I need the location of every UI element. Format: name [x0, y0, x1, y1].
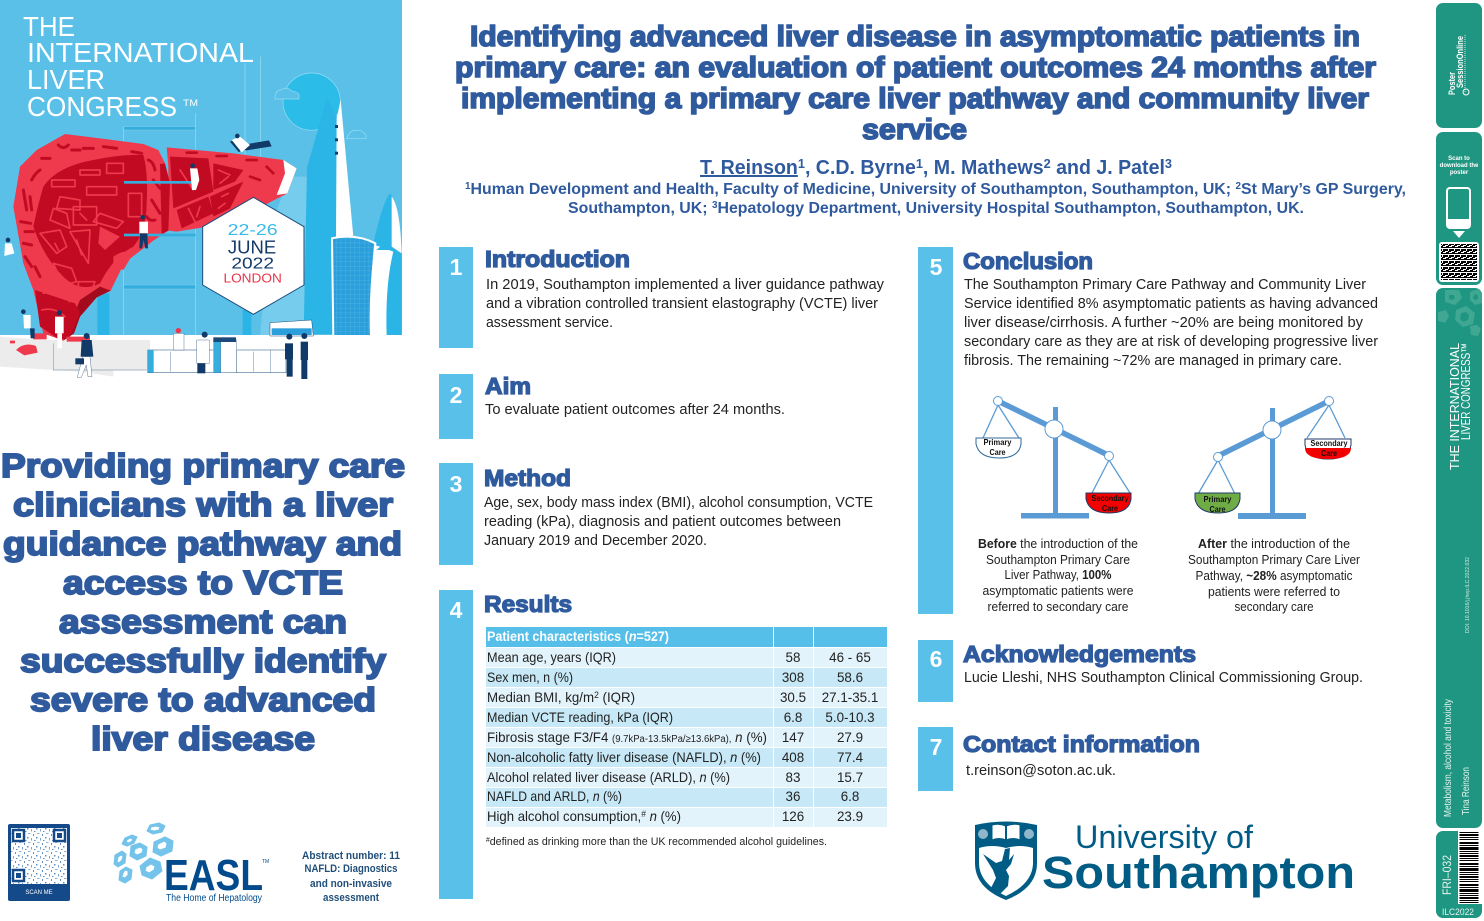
- congress name: CONGRESS: [27, 91, 177, 122]
- section 2: aim: Aim: [485, 373, 531, 399]
- table: patient characteristics: Median VCTE reading, kPa (IQR): [487, 709, 673, 725]
- section 3: method: [439, 463, 873, 565]
- section 2: aim: 2: [450, 382, 462, 408]
- title: implementing a primary care liver pathway and community liver: [461, 83, 1369, 115]
- section 1: introduction: assessment service.: [486, 314, 613, 331]
- logo: EASL: TM: [262, 859, 269, 865]
- section 5: conclusion: liver disease/cirrhosis. A further ~20% are being monitored by: [964, 314, 1363, 331]
- chart: before scale: Care: [1102, 503, 1118, 513]
- left message: successfully identify: [20, 643, 386, 680]
- section 1: introduction: Introduction: [485, 246, 630, 272]
- chart: before scale: Care: [990, 447, 1006, 457]
- table: patient characteristics: (IQR): [599, 689, 635, 705]
- section 5: conclusion: secondary care as they are at risk of developing progressive liver: [964, 333, 1378, 350]
- table: patient characteristics: 36: [786, 789, 800, 804]
- table: patient characteristics: [486, 627, 887, 827]
- authors: Hepatology Department, University Hospital Southampton, Southampton, UK.: [717, 200, 1304, 217]
- left message: access to VCTE: [63, 565, 343, 602]
- section 5: conclusion: 5: [930, 254, 943, 280]
- abstract details: [302, 850, 400, 904]
- logo: EASL: The Home of Hepatology: [166, 893, 262, 904]
- illustration: city skyline and liver: 22-26: [228, 222, 278, 239]
- chart: before scale: Secondary: [1092, 493, 1129, 503]
- table: patient characteristics: n (%): [650, 808, 683, 824]
- section 7: contact information: Contact information: [963, 731, 1200, 757]
- sidebar panel: scan to download: [1436, 132, 1482, 285]
- authors: Human Development and Health, Faculty of Medicine, University of Southampton, Southampton, UK;: [471, 181, 1236, 198]
- authors: 3: [1165, 156, 1172, 171]
- section 5: conclusion: Conclusion: [963, 248, 1093, 274]
- sidebar panel: congress details: Tina Reinson: [1461, 767, 1472, 815]
- section 4: results: Results: [484, 591, 572, 617]
- sidebar panel: scan to download: poster: [1450, 170, 1469, 176]
- authors: and J. Patel: [1051, 157, 1165, 179]
- table: patient characteristics: 408: [782, 750, 804, 765]
- section 4: results: [439, 590, 887, 899]
- title: service: [862, 114, 967, 146]
- caption: before: referred to secondary care: [988, 600, 1129, 614]
- liver left lobe: [13, 134, 168, 341]
- left message: Providing primary care: [1, 448, 405, 485]
- table: patient characteristics: Alcohol related liver disease (ARLD), n (%): [487, 769, 730, 785]
- caption: before: asymptomatic patients were: [982, 584, 1134, 598]
- section 3: method: Age, sex, body mass index (BMI), alcohol consumption, VCTE: [484, 494, 873, 511]
- congress name: INTERNATIONAL: [27, 37, 254, 68]
- congress name: TM: [183, 98, 198, 108]
- section 3: method: January 2019 and December 2020.: [484, 532, 707, 549]
- logo: University of Southampton: Southampton: [1042, 847, 1355, 898]
- table: patient characteristics: 27.1-35.1: [822, 690, 878, 705]
- table: patient characteristics: Fibrosis stage F3/F4 (9.7kPa-13.5kPa/≥13.6kPa), n (%): [487, 729, 767, 745]
- platforms: [124, 181, 194, 184]
- title: Identifying advanced liver disease in asymptomatic patients in: [470, 21, 1360, 53]
- table: patient characteristics: 126: [782, 809, 804, 824]
- table: patient characteristics: 58.6: [837, 670, 863, 685]
- section 3: method: 3: [450, 471, 462, 497]
- section 1: introduction: [439, 246, 884, 348]
- section 6: acknowledgements: Lucie Lleshi, NHS Southampton Clinical Commissioning Group.: [964, 669, 1363, 686]
- table: patient characteristics: NAFLD and ARLD, n (%): [487, 788, 622, 804]
- caption: after: Southampton Primary Care Liver: [1188, 553, 1360, 567]
- sidebar panel: scan to download: download the: [1440, 163, 1479, 169]
- section 2: aim: [439, 373, 785, 439]
- sidebar panel: congress details: DOI: 10.1016/j.jhep.ILC.2022.032: [1465, 557, 1471, 633]
- authors: St Mary’s GP Surgery,: [1241, 181, 1406, 198]
- caption: after: After the introduction of the: [1198, 537, 1350, 551]
- table footnote: defined as drinking more than the UK recommended alcohol guidelines.: [490, 836, 827, 848]
- section 5: conclusion: Service identified 8% asymptomatic patients as having advanced: [964, 295, 1378, 312]
- abstract details: Abstract number: 11: [302, 850, 400, 862]
- table: patient characteristics: 15.7: [837, 770, 863, 785]
- section 6: acknowledgements: Acknowledgements: [963, 641, 1196, 667]
- sidebar panel: congress details: [1436, 288, 1482, 828]
- table: patient characteristics: 83: [786, 770, 800, 785]
- logo: University of Southampton: University of: [1075, 819, 1253, 855]
- section 1: introduction: 1: [450, 254, 463, 280]
- caption: after: Pathway, ~28% asymptomatic: [1196, 569, 1352, 583]
- sidebar panel: poster code and barcode: [1436, 831, 1482, 918]
- caption: after: secondary care: [1234, 600, 1314, 614]
- table: patient characteristics: 27.9: [837, 730, 863, 745]
- sidebar panel: congress details: THE INTERNATIONAL: [1448, 343, 1462, 470]
- chart: before scale: [976, 396, 1131, 518]
- section 3: method: reading (kPa), diagnosis and patient outcomes between: [484, 513, 841, 530]
- table: patient characteristics: 5.0-10.3: [825, 710, 875, 725]
- logo: EASL: EASL: [164, 851, 263, 900]
- section 5: conclusion: fibrosis. The remaining ~72% are managed in primary care.: [964, 352, 1342, 369]
- table: patient characteristics: 58: [786, 650, 800, 665]
- title: [455, 21, 1376, 146]
- illustration: city skyline and liver: LONDON: [223, 272, 282, 286]
- section 5: conclusion: [918, 247, 1378, 614]
- section 7: contact information: 7: [930, 734, 942, 760]
- sidebar panel: congress details: LIVER CONGRESS™: [1459, 343, 1473, 440]
- authors: 3: [712, 200, 718, 211]
- chart: before scale: Primary: [984, 437, 1012, 447]
- caption: before: Liver Pathway, 100%: [1004, 568, 1112, 582]
- authors: , C.D. Byrne: [805, 157, 916, 179]
- caption: after: patients were referred to: [1208, 585, 1340, 599]
- illustration: city skyline and liver: JUNE: [228, 236, 276, 257]
- table: patient characteristics: 6.8: [784, 710, 802, 725]
- title: primary care: an evaluation of patient outcomes 24 months after: [455, 52, 1376, 84]
- left message: guidance pathway and: [3, 526, 402, 563]
- table: patient characteristics: Mean age, years (IQR): [487, 649, 616, 665]
- authors: 2: [1044, 156, 1051, 171]
- section 1: introduction: and a vibration controlled transient elastography (VCTE) liver: [486, 295, 878, 312]
- chart: after scale: Care: [1321, 448, 1337, 458]
- left message: clinicians with a liver: [13, 487, 393, 524]
- hexagon date badge: [203, 197, 304, 314]
- liver rim blobs: [21, 145, 160, 277]
- authors: [465, 156, 1406, 217]
- illustration: city skyline and liver: 2022: [231, 256, 274, 273]
- left message: severe to advanced: [30, 682, 376, 719]
- table: patient characteristics: Non-alcoholic fatty liver disease (NAFLD), n (%): [487, 749, 761, 765]
- authors: 2: [1236, 181, 1241, 192]
- congress name: THE: [23, 11, 75, 42]
- abstract details: assessment: [323, 892, 379, 904]
- chart: after scale: Care: [1210, 504, 1226, 514]
- chart: after scale: Secondary: [1310, 438, 1348, 448]
- left message: assessment can: [59, 604, 347, 641]
- illustration: city skyline and liver: [0, 57, 402, 400]
- caption: before: Before the introduction of the: [978, 537, 1138, 551]
- logo: EASL: [114, 823, 269, 904]
- abstract details: and non-invasive: [310, 878, 392, 890]
- authors: , M. Mathews: [923, 157, 1044, 179]
- caption: after: [1188, 537, 1360, 614]
- table: patient characteristics: 23.9: [837, 809, 863, 824]
- icon: phone: [1447, 188, 1470, 228]
- sidebar panel: congress details: Metabolism, alcohol and toxicity: [1443, 699, 1454, 817]
- sidebar panel: poster session online: Poster: [1447, 72, 1458, 95]
- section 7: contact information: [918, 727, 1200, 791]
- people: [4, 134, 308, 379]
- congress name: [23, 11, 254, 122]
- table: patient characteristics: Sex men, n (%): [487, 669, 573, 685]
- table: patient characteristics: Patient characteristics (n=527): [487, 628, 669, 644]
- liver inner cells: [40, 163, 142, 317]
- sidebar panel: poster code and barcode: FRI–032: [1440, 855, 1454, 895]
- section 1: introduction: In 2019, Southampton implemented a liver guidance pathway: [486, 276, 884, 293]
- liver right lobe: [167, 147, 297, 232]
- sidebar panel: poster session online: SessionOnline: [1455, 36, 1466, 88]
- table: patient characteristics: 147: [782, 730, 804, 745]
- table footnote: #: [486, 837, 490, 844]
- table: patient characteristics: 77.4: [837, 750, 864, 765]
- icon: QR code scan me: SCAN ME: [25, 890, 53, 896]
- chart: after scale: [1195, 396, 1351, 519]
- chart: after scale: Primary: [1204, 494, 1232, 504]
- table: patient characteristics: 308: [782, 670, 804, 685]
- table: patient characteristics: 46 - 65: [829, 650, 871, 665]
- authors: Southampton, UK;: [568, 200, 708, 217]
- logo: University of Southampton: [975, 819, 1355, 900]
- authors: T. Reinson: [700, 157, 798, 179]
- table: patient characteristics: 30.5: [780, 690, 806, 705]
- caption: before: Southampton Primary Care: [986, 553, 1130, 567]
- ground: [0, 335, 402, 400]
- left message: [1, 448, 405, 758]
- QR code: [1439, 242, 1479, 282]
- table: patient characteristics: Median BMI, kg/m: [487, 689, 600, 705]
- section 3: method: Method: [484, 465, 571, 491]
- authors: 1: [465, 181, 471, 192]
- abstract details: NAFLD: Diagnostics: [304, 863, 398, 875]
- section 4: results: 4: [450, 597, 463, 623]
- bus and lab: [270, 320, 313, 336]
- authors: 1: [916, 156, 923, 171]
- section 6: acknowledgements: 6: [930, 646, 942, 672]
- sidebar panel: poster code and barcode: ILC2022: [1442, 907, 1474, 917]
- authors: 1: [798, 156, 805, 171]
- table: patient characteristics: High alcohol consumption,: [487, 808, 651, 824]
- section 5: conclusion: The Southampton Primary Care Pathway and Community Liver: [964, 276, 1366, 293]
- table: patient characteristics: 6.8: [841, 789, 859, 804]
- table: patient characteristics: #: [641, 809, 646, 819]
- section 2: aim: To evaluate patient outcomes after 24 months.: [485, 401, 785, 418]
- panel: congress banner illustration: [0, 0, 402, 400]
- table: patient characteristics: 2: [594, 690, 599, 700]
- left message: liver disease: [91, 721, 315, 758]
- congress name: LIVER: [27, 64, 105, 95]
- sidebar panel: scan to download: Scan to: [1448, 156, 1470, 162]
- sidebar panel: poster session online: [1436, 3, 1482, 128]
- caption: before: [978, 537, 1138, 614]
- section 7: contact information: t.reinson@soton.ac.uk.: [966, 762, 1116, 779]
- section 6: acknowledgements: [918, 640, 1363, 702]
- icon: QR code scan me: [8, 824, 70, 901]
